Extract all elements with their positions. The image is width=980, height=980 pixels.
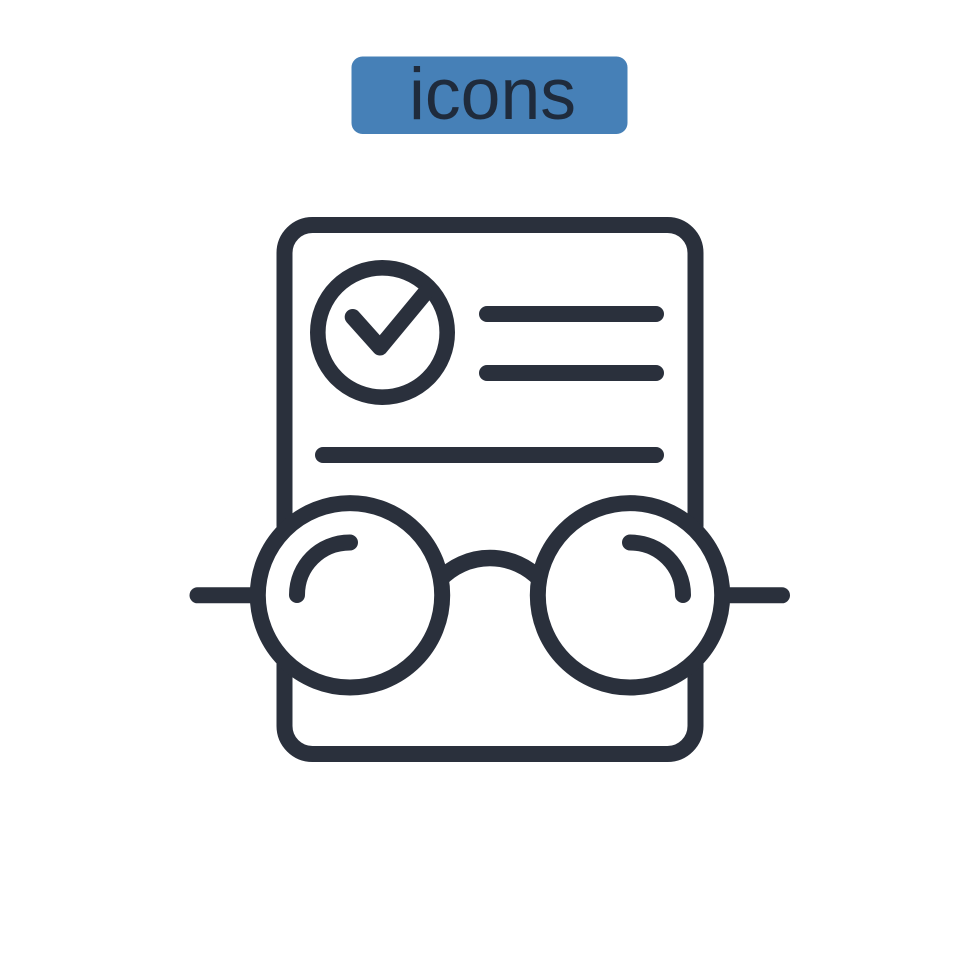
icon: document with glasses	[198, 225, 782, 754]
check badge	[318, 268, 447, 397]
glasses	[198, 503, 782, 688]
document text lines	[323, 314, 656, 455]
title badge	[352, 54, 628, 135]
document outline	[284, 225, 696, 754]
title badge: icons	[409, 54, 576, 135]
